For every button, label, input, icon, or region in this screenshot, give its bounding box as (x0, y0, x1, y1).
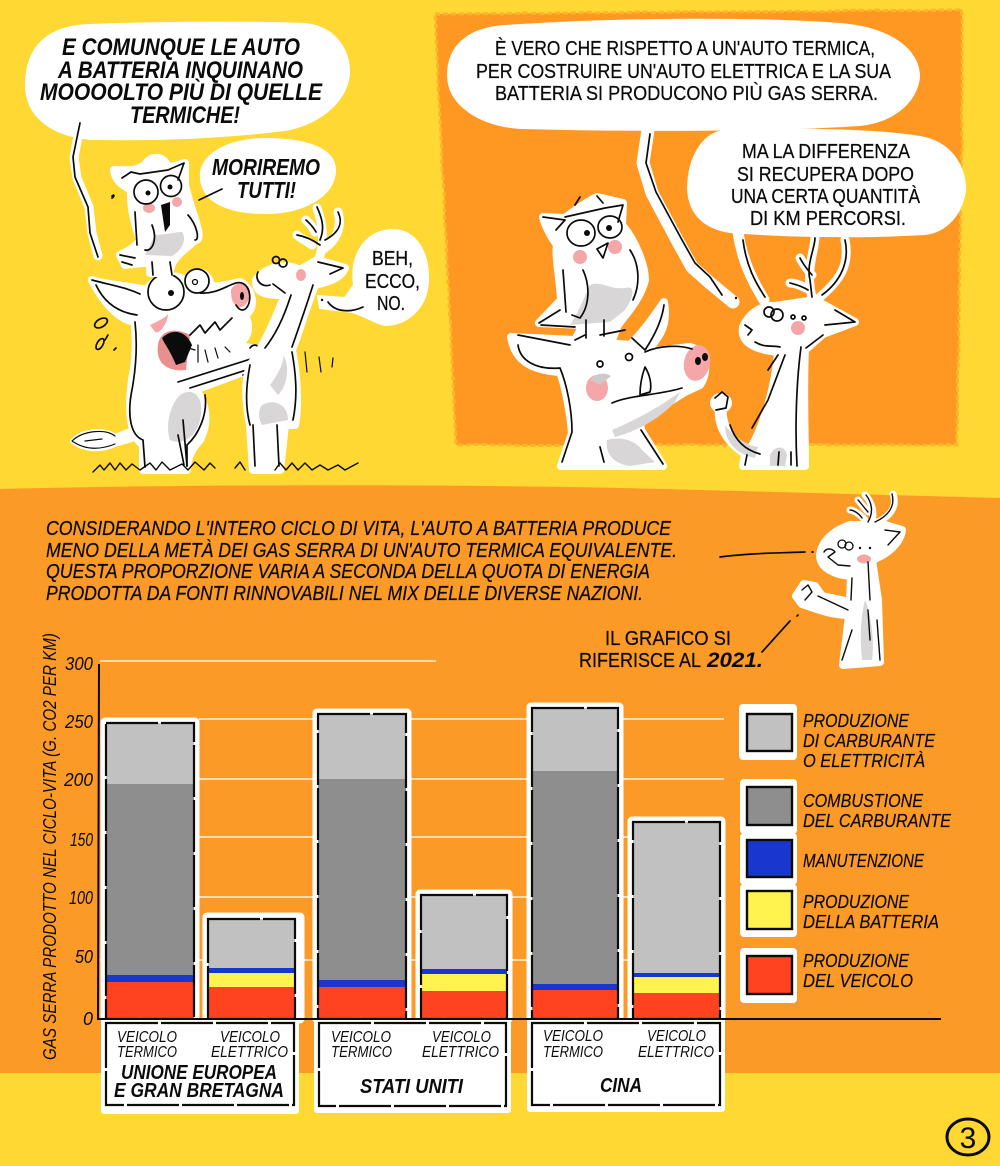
speech bubble: e vero che: È VERO CHE RISPETTO A UN'AUTO TERMICA, (495, 37, 875, 60)
speech bubble: beh ecco no: ECCO, (365, 271, 420, 293)
speech bubble: ma la differenza (688, 130, 965, 300)
intro text: CONSIDERANDO L'INTERO CICLO DI VITA, L'AUTO A BATTERIA PRODUCE (46, 518, 672, 540)
speech bubble: moriremo tutti: MORIREMO (212, 154, 320, 180)
character: owl, left scene (112, 158, 199, 275)
page number: 3 (960, 1122, 976, 1155)
label box: Cina: VEICOLO (543, 1028, 603, 1045)
legend item: produzione della batteria: DELLA BATTERIA (803, 912, 939, 932)
y axis labels: 150 (70, 830, 93, 850)
note: il grafico si riferisce al 2021: 2021. (706, 649, 763, 672)
bar: China thermal (531, 707, 619, 1019)
gridlines (100, 661, 724, 960)
label box: Cina: VEICOLO (647, 1028, 706, 1045)
label box: Unione Europea: ELETTRICO (211, 1044, 288, 1061)
note: il grafico si riferisce al 2021: RIFERISCE AL (579, 650, 701, 672)
panel: bottom orange band (0, 485, 1000, 1073)
bar: EU electric (207, 917, 300, 1019)
label box: Unione Europea: VEICOLO (220, 1029, 280, 1046)
legend item: produzione di carburante o elettricita: DI CARBURANTE (803, 731, 936, 751)
label box: Stati Uniti: VEICOLO (331, 1029, 391, 1046)
speech bubble: auto a batteria: A BATTERIA INQUINANO (57, 57, 303, 84)
label box: Unione Europea (104, 1021, 296, 1111)
y axis labels: 200 (63, 770, 93, 790)
character: owl, right scene (539, 196, 645, 340)
label box: Cina (530, 1021, 722, 1109)
legend item: combustione del carburante: COMBUSTIONE (803, 791, 924, 811)
note: il grafico si riferisce al 2021 (579, 615, 798, 672)
speech bubble: ma la differenza: DI KM PERCORSI. (750, 208, 906, 230)
y axis labels: 250 (64, 712, 93, 732)
legend item: produzione del veicolo: DEL VEICOLO (803, 971, 913, 991)
legend item: produzione di carburante o elettricita (743, 708, 936, 771)
legend item: combustione del carburante: DEL CARBURANTE (803, 811, 952, 831)
panel: top right orange (435, 10, 962, 445)
intro text (46, 518, 677, 605)
character: boar, left scene (72, 269, 262, 470)
y axis labels (63, 654, 93, 1029)
speech bubble: auto a batteria: MOOOOLTO PIÙ DI QUELLE (40, 78, 323, 106)
label box: Unione Europea: VEICOLO (117, 1029, 177, 1046)
character: deer, left scene (246, 207, 345, 470)
bar: EU thermal (105, 722, 195, 1019)
legend item: combustione del carburante (744, 783, 952, 831)
y axis labels: 50 (75, 947, 93, 967)
speech bubble: e vero che: PER COSTRUIRE UN'AUTO ELETTRICA E LA SUA (476, 61, 892, 83)
speech bubble: ma la differenza: SI RECUPERA DOPO (737, 164, 914, 186)
speech bubble: beh ecco no: BEH, (372, 248, 413, 270)
label box: Stati Uniti: VEICOLO (432, 1029, 491, 1046)
intro text: QUESTA PROPORZIONE VARIA A SECONDA DELLA QUOTA DI ENERGIA (46, 561, 650, 583)
legend (743, 708, 952, 999)
grass (93, 462, 358, 472)
speech bubble: beh ecco no (318, 230, 428, 325)
speech bubble: e vero che (448, 20, 919, 302)
legend item: produzione di carburante o elettricita: PRODUZIONE (803, 711, 910, 731)
bar: USA electric (420, 894, 508, 1019)
character: small deer (796, 494, 902, 665)
speech bubble: ma la differenza: MA LA DIFFERENZA (742, 141, 911, 163)
label box: Stati Uniti: STATI UNITI (360, 1076, 463, 1098)
speech bubble: beh ecco no: NO. (377, 293, 405, 315)
label box: Cina: ELETTRICO (638, 1044, 714, 1061)
speech bubble: auto a batteria (26, 23, 349, 257)
speech bubble: e vero che: BATTERIA SI PRODUCONO PIÙ GAS SERRA. (495, 82, 878, 105)
intro text: PRODOTTA DA FONTI RINNOVABILI NEL MIX DELLE DIVERSE NAZIONI. (46, 583, 643, 605)
page number (947, 1119, 989, 1155)
legend item: produzione di carburante o elettricita: O ELETTRICITÀ (803, 751, 925, 771)
label box: Cina: TERMICO (543, 1044, 603, 1061)
pointer line: small deer to intro (720, 552, 813, 557)
intro text: MENO DELLA METÀ DEI GAS SERRA DI UN'AUTO TERMICA EQUIVALENTE. (46, 539, 677, 562)
speech bubble: moriremo tutti (199, 139, 335, 213)
legend item: manutenzione (744, 837, 925, 881)
chart: gas serra per ciclo-vita (40, 633, 941, 1111)
legend item: manutenzione: MANUTENZIONE (803, 851, 925, 871)
icon: sweat drops (93, 316, 116, 351)
legend item: produzione della batteria (744, 888, 939, 933)
speech bubble: ma la differenza: UNA CERTA QUANTITÀ (731, 185, 921, 208)
character: deer, right scene (710, 237, 855, 466)
y axis labels: 0 (83, 1009, 93, 1029)
label box: Cina: CINA (600, 1075, 642, 1097)
y axis labels: 100 (69, 888, 93, 908)
label box: Unione Europea: TERMICO (117, 1044, 177, 1061)
speech bubble: auto a batteria: E COMUNQUE LE AUTO (62, 34, 300, 61)
label box: Stati Uniti (317, 1021, 508, 1110)
note: il grafico si riferisce al 2021: IL GRAFICO SI (605, 628, 731, 650)
speech bubble: moriremo tutti: TUTTI! (237, 177, 296, 203)
legend item: produzione del veicolo: PRODUZIONE (803, 951, 910, 971)
character: boar, right scene (511, 302, 713, 466)
label box: Stati Uniti: ELETTRICO (422, 1044, 499, 1061)
speech bubble: auto a batteria: TERMICHE! (130, 102, 240, 129)
label box: Stati Uniti: TERMICO (331, 1044, 392, 1061)
y axis title: GAS SERRA PRODOTTO NEL CICLO-VITA (G. CO2 PER KM) (40, 633, 60, 1060)
legend item: produzione del veicolo (744, 951, 913, 999)
label box: Unione Europea: UNIONE EUROPEA (121, 1062, 277, 1084)
y axis labels: 300 (65, 654, 93, 674)
bar: China electric (632, 821, 721, 1019)
label box: Unione Europea: E GRAN BRETAGNA (114, 1080, 284, 1102)
axes (97, 664, 941, 1019)
bar: USA thermal (317, 713, 407, 1019)
legend item: produzione della batteria: PRODUZIONE (803, 892, 910, 912)
